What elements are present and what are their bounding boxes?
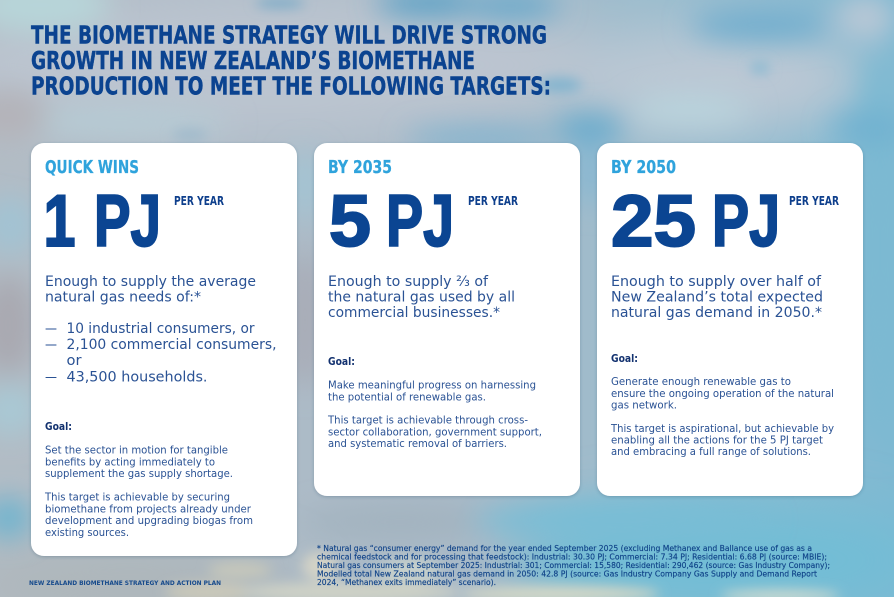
text: goal description: enabling all the actions for the 5 PJ target <box>611 434 824 446</box>
title: GROWTH IN NEW ZEALAND’S BIOMETHANE <box>31 46 475 75</box>
unit: per year: PER YEAR <box>789 194 839 208</box>
text: goal description <box>44 444 253 539</box>
footnote: * Natural gas “consumer energy” demand for the year ended September 2025 (excluding Methanex and Ballance use of gas as a <box>317 544 812 553</box>
big number: 1 PJ: PJ <box>94 181 161 262</box>
unit: per year: PER YEAR <box>174 194 224 208</box>
big number: 1 PJ <box>44 181 161 262</box>
text: supply description: natural gas demand in 2050.* <box>611 305 822 321</box>
text: goal description: supplement the gas supply shortage. <box>45 467 233 480</box>
text: supply description: Enough to supply the average <box>45 274 256 290</box>
text: goal description: Generate enough renewable gas to <box>611 375 791 388</box>
text: goal description: existing sources. <box>45 526 129 539</box>
list: consumers <box>45 321 276 386</box>
text: goal description: development and upgrading biogas from <box>45 514 253 527</box>
text: supply description: Enough to supply over half of <box>611 274 822 290</box>
text: supply description <box>611 274 823 321</box>
unit: per year: PER YEAR <box>468 194 518 208</box>
list: consumers: — <box>45 370 57 386</box>
footnote: chemical feedstock and for processing that feedstock): Industrial: 30.30 PJ; Commercial: 7.34 PJ; Residential: 6.68 PJ (source: MBIE); <box>317 552 827 562</box>
text: supply description: the natural gas used by all <box>328 290 515 306</box>
publication name: NEW ZEALAND BIOMETHANE STRATEGY AND ACTION PLAN <box>29 579 221 587</box>
big number: 5 PJ: PJ <box>386 181 454 262</box>
text: goal description: and embracing a full range of solutions. <box>611 445 811 458</box>
text: supply description: Enough to supply ⅔ of <box>328 274 489 290</box>
list: consumers: 10 industrial consumers, or <box>66 321 255 337</box>
list: consumers: 2,100 commercial consumers, <box>66 337 276 353</box>
title: PRODUCTION TO MEET THE FOLLOWING TARGETS: <box>31 72 551 100</box>
text: goal description: the potential of renewable gas. <box>328 390 486 404</box>
text: goal description: Set the sector in motion for tangible <box>45 444 228 456</box>
heading: quick wins: QUICK WINS <box>45 158 139 178</box>
big number: 25 PJ: 25 <box>611 181 696 262</box>
text: goal description: sector collaboration, government support, <box>328 426 542 438</box>
list: consumers: — <box>45 337 57 353</box>
heading: by 2050: BY 2050 <box>611 158 676 178</box>
text: goal description: and systematic removal of barriers. <box>328 437 507 450</box>
text: goal description: ensure the ongoing operation of the natural <box>611 387 834 400</box>
goal label: Goal: <box>328 355 355 368</box>
footnote: Natural gas consumers at September 2025: Industrial: 301; Commercial: 15,580; Residential: 290,462 (source: Gas Industry Company); <box>317 561 830 570</box>
title <box>31 20 551 100</box>
text: goal description <box>610 375 834 458</box>
text: goal description: benefits by acting immediately to <box>45 456 215 468</box>
text: goal description: This target is achievable through cross- <box>327 414 528 426</box>
big number: 25 PJ <box>611 181 780 262</box>
list: consumers: 43,500 households. <box>66 370 208 386</box>
text: goal description: This target is achievable by securing <box>44 490 230 504</box>
footnote: 2024, “Methanex exits immediately” scenario). <box>317 578 496 587</box>
text: goal description: This target is aspirational, but achievable by <box>610 422 834 435</box>
big number: 25 PJ: PJ <box>712 181 780 262</box>
list: consumers: — <box>45 321 57 337</box>
footnote: Modelled total New Zealand natural gas demand in 2050: 42.8 PJ (source: Gas Industry Company Gas Supply and Demand Report <box>317 570 817 578</box>
text: goal description: Make meaningful progress on harnessing <box>328 378 536 392</box>
big number: 5 PJ <box>329 181 454 262</box>
panel: quick wins <box>31 143 297 556</box>
goal label: Goal: <box>45 420 72 433</box>
big number: 1 PJ: 1 <box>44 181 76 262</box>
text: goal description: biomethane from projects already under <box>45 502 251 516</box>
text: supply description: natural gas needs of:* <box>45 290 201 306</box>
text: supply description <box>45 274 256 306</box>
panel: by 2050 <box>597 143 863 496</box>
footnote <box>317 544 830 587</box>
heading: by 2035: BY 2035 <box>328 158 392 178</box>
goal label: Goal: <box>611 352 638 365</box>
text: supply description: New Zealand’s total expected <box>611 290 823 306</box>
panel: by 2035 <box>314 143 580 496</box>
text: supply description: commercial businesses.* <box>328 305 500 321</box>
text: goal description <box>327 378 542 450</box>
text: goal description: gas network. <box>611 398 677 412</box>
text: supply description <box>328 274 515 321</box>
title: THE BIOMETHANE STRATEGY WILL DRIVE STRONG <box>31 20 547 50</box>
big number: 5 PJ: 5 <box>329 181 371 262</box>
list: consumers: or <box>66 353 82 369</box>
